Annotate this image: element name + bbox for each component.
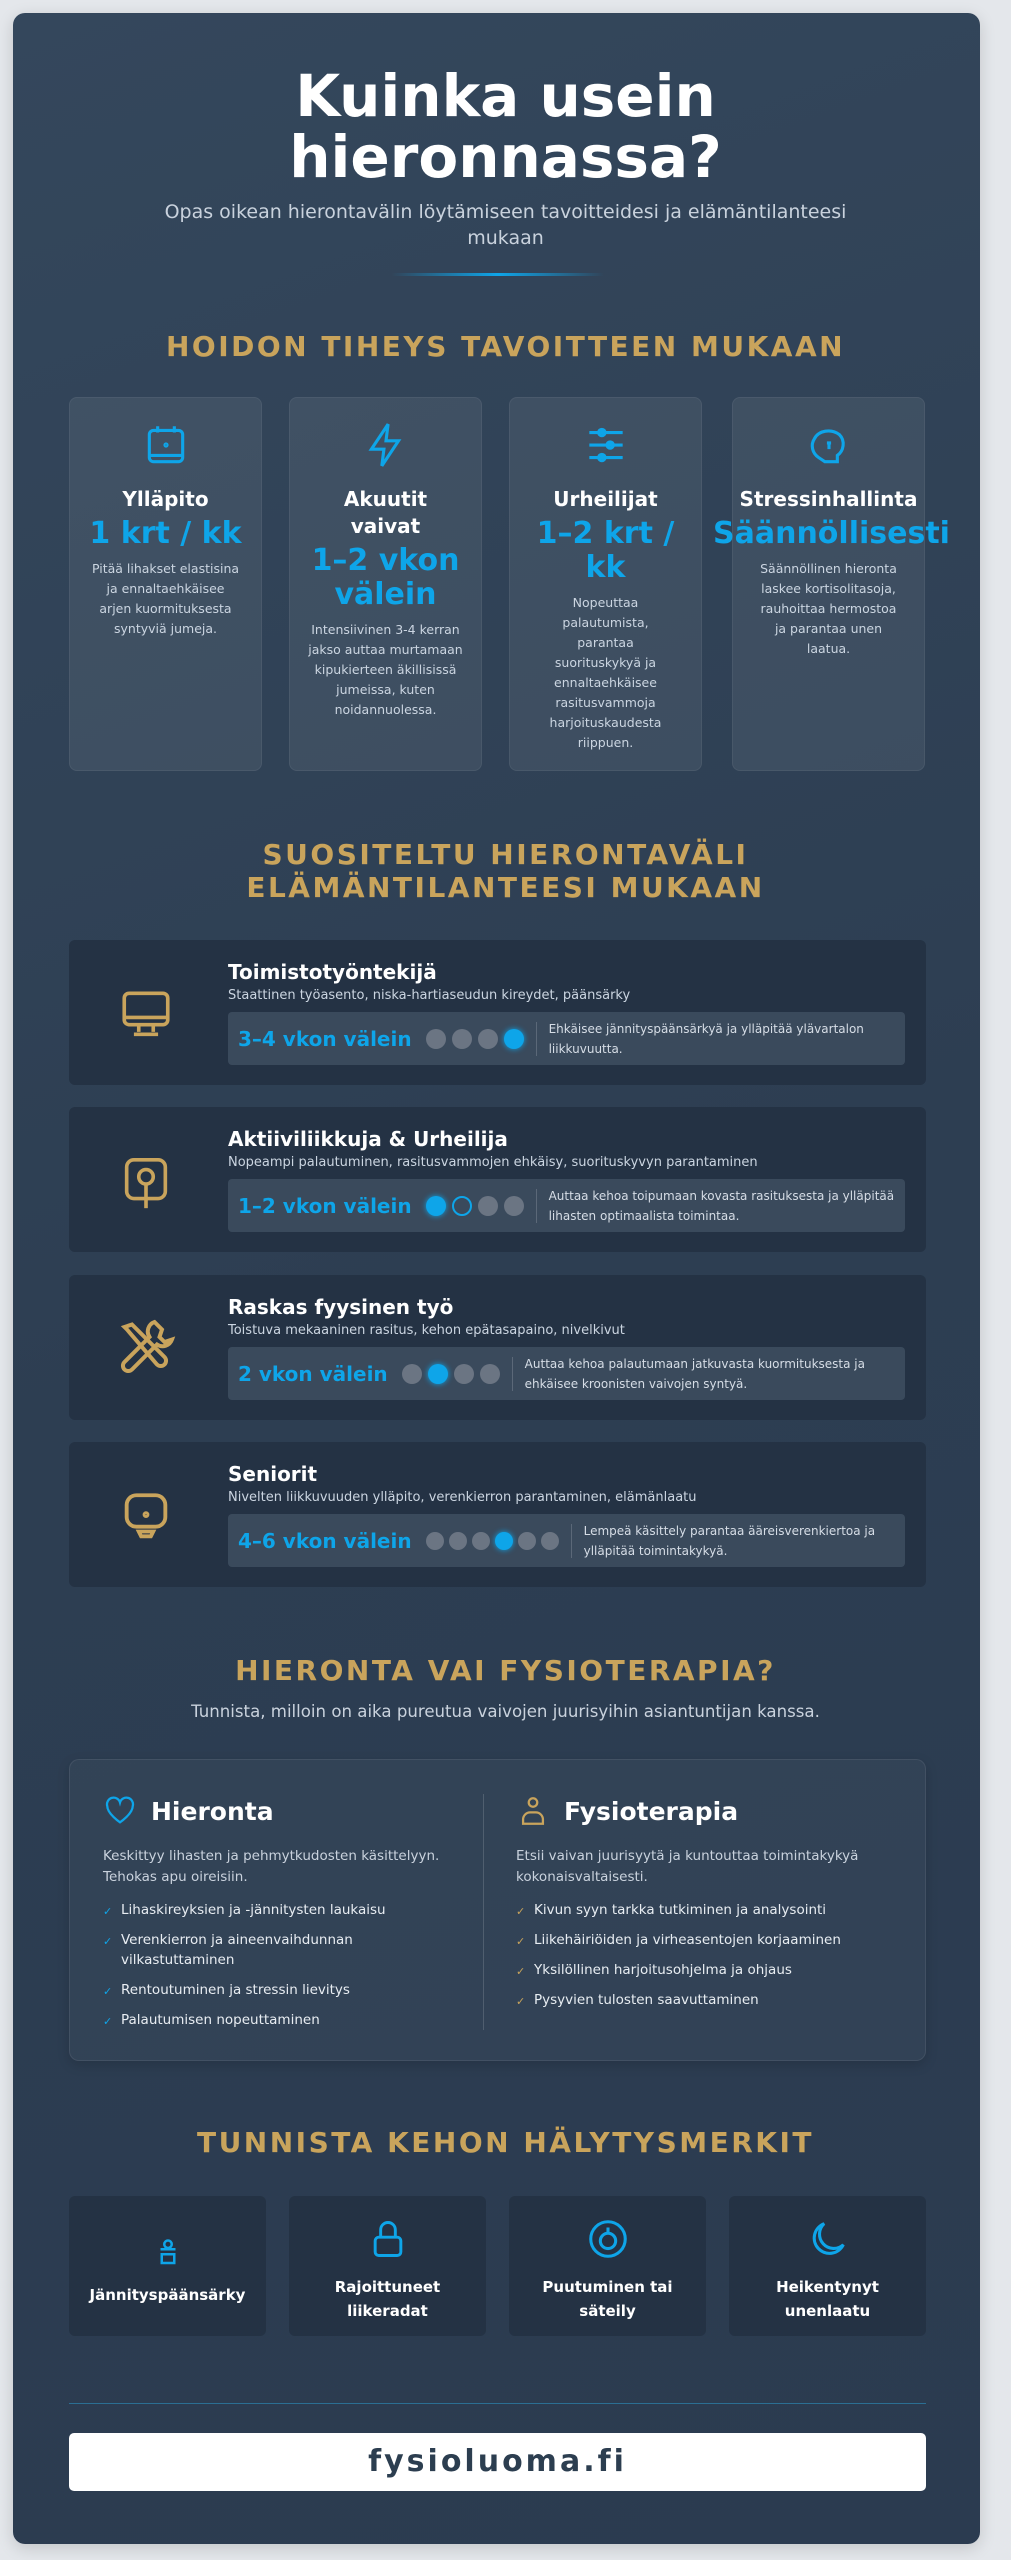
- column: Hieronta: vilkastuttaminen: [121, 1952, 234, 1968]
- goal card: Ylläpito: Ylläpito: [122, 487, 209, 511]
- frequency bar: [228, 1347, 905, 1400]
- warning card: range of motion: [289, 2196, 486, 2336]
- row: seniors: Nivelten liikkuvuuden ylläpito, verenkierron parantaminen, elämänlaatu: [228, 1490, 696, 1505]
- warning card: range of motion: Rajoittuneet: [335, 2278, 440, 2296]
- goal card: Urheilijat: Urheilijat: [553, 487, 658, 511]
- frequency bar: 3–4 vkon välein: [238, 1026, 412, 1050]
- row: seniors: [69, 1442, 926, 1587]
- column: Fysioterapia: Yksilöllinen harjoitusohjelma ja ohjaus: [534, 1962, 792, 1978]
- goal card: Akuutit: [289, 397, 482, 771]
- frequency bar: liikkuvuutta.: [549, 1042, 623, 1056]
- column: Fysioterapia: [516, 1796, 858, 2008]
- frequency bar: ehkäisee kroonisten vaivojen syntyä.: [525, 1376, 747, 1390]
- column: Fysioterapia: Fysioterapia: [564, 1796, 738, 1826]
- column: Fysioterapia: Pysyvien tulosten saavuttaminen: [534, 1992, 759, 2008]
- heading: life situations: SUOSITELTU HIERONTAVÄLI: [262, 838, 748, 871]
- column: Hieronta: Palautumisen nopeuttaminen: [121, 2012, 320, 2028]
- frequency bar: [228, 1012, 905, 1065]
- icon: calendar: [148, 426, 184, 464]
- footer line: [69, 2403, 926, 2404]
- icon: pin: [124, 1158, 168, 1208]
- warning card: headache: Jännityspäänsärky: [90, 2286, 245, 2304]
- icon: tools: [120, 1320, 176, 1373]
- row: heavy work: [69, 1275, 926, 1420]
- warning card: sleep: [729, 2196, 926, 2336]
- column: Hieronta: Verenkierron ja aineenvaihdunnan: [121, 1932, 353, 1948]
- row: athlete: Aktiiviliikkuja & Urheilija: [228, 1127, 508, 1151]
- row: seniors: Seniorit: [228, 1462, 317, 1486]
- goal card: Akuutit: 1–2 vkon: [312, 543, 459, 578]
- goal card: Urheilijat: kk: [586, 550, 625, 585]
- heading: life situations: [246, 838, 765, 904]
- warning card: sleep: Heikentynyt: [776, 2278, 879, 2296]
- warning card: headache: [69, 2196, 266, 2336]
- row: office worker: [69, 940, 926, 1085]
- goal card: Akuutit: vaivat: [351, 514, 420, 538]
- frequency bar: ylläpitää toimintakykyä.: [584, 1544, 727, 1558]
- row: office worker: Staattinen työasento, niska-hartiaseudun kireydet, päänsärky: [228, 988, 630, 1003]
- column: Hieronta: Rentoutuminen ja stressin lievitys: [121, 1982, 350, 1998]
- frequency bar: 2 vkon välein: [238, 1362, 388, 1386]
- column: Hieronta: Lihaskireyksien ja -jännitysten laukaisu: [121, 1902, 386, 1918]
- icon: lightning: [368, 423, 402, 467]
- frequency bar: lihasten optimaalista toimintaa.: [549, 1208, 739, 1222]
- row: athlete: [69, 1107, 926, 1252]
- title: [289, 62, 722, 191]
- column: Fysioterapia: kokonaisvaltaisesti.: [516, 1869, 648, 1885]
- goal card: Ylläpito: [69, 397, 262, 771]
- column: Fysioterapia: Liikehäiriöiden ja virheasentojen korjaaminen: [534, 1932, 841, 1948]
- heading: warning signs: TUNNISTA KEHON HÄLYTYSMERKIT: [197, 2126, 814, 2159]
- goal card: Stressinhallinta: Säännöllisesti: [713, 516, 950, 551]
- heading: goals: HOIDON TIHEYS TAVOITTEEN MUKAAN: [166, 330, 845, 363]
- icon: head: [810, 429, 845, 464]
- goal card: Akuutit: Intensiivinen 3-4 kerran jakso auttaa murtamaan kipukierteen äkillisissä jumeissa, kuten noidannuolessa.: [308, 622, 463, 717]
- warning card: numbness: säteily: [579, 2302, 636, 2320]
- frequency bar: Auttaa kehoa palautumaan jatkuvasta kuormituksesta ja: [525, 1356, 865, 1370]
- row: athlete: Nopeampi palautuminen, rasitusvammojen ehkäisy, suorituskyvyn parantaminen: [228, 1155, 758, 1170]
- frequency bar: Ehkäisee jännityspäänsärkyä ja ylläpitää ylävartalon: [549, 1022, 864, 1036]
- column: Fysioterapia: Etsii vaivan juurisyytä ja kuntouttaa toimintakykyä: [516, 1848, 858, 1864]
- goal card: Akuutit: välein: [334, 577, 437, 612]
- column: Hieronta: Tehokas apu oireisiin.: [103, 1869, 248, 1885]
- icon: device: [124, 1493, 168, 1538]
- goal card: Urheilijat: 1–2 krt /: [537, 516, 674, 551]
- frequency bar: Auttaa kehoa toipumaan kovasta rasituksesta ja ylläpitää: [549, 1188, 894, 1202]
- column: Hieronta: [102, 1796, 439, 2028]
- column: Hieronta: Hieronta: [151, 1796, 274, 1826]
- heading: life situations: ELÄMÄNTILANTEESI MUKAAN: [246, 871, 765, 904]
- subheading: Tunnista, milloin on aika pureutua vaivojen juurisyihin asiantuntijan kanssa.: [191, 1702, 820, 1721]
- title: Kuinka usein: [295, 62, 716, 130]
- goal card: Urheilijat: [509, 397, 702, 771]
- icon: monitor: [122, 992, 170, 1036]
- goal card: Ylläpito: Pitää lihakset elastisina ja ennaltaehkäisee arjen kuormituksesta syntyviä jumeja.: [92, 561, 239, 636]
- divider accent: [392, 273, 604, 276]
- title: hieronnassa?: [289, 123, 722, 191]
- row: office worker: Toimistotyöntekijä: [228, 960, 437, 984]
- comparison panel: [69, 1759, 926, 2061]
- frequency bar: [228, 1179, 905, 1232]
- footer: website: [69, 2433, 926, 2491]
- footer: website: fysioluoma.fi: [368, 2444, 627, 2479]
- goal card: Stressinhallinta: Stressinhallinta: [740, 487, 917, 511]
- subtitle: Opas oikean hierontavälin löytämiseen tavoitteidesi ja elämäntilanteesi mukaan: [165, 201, 846, 249]
- goal card: Stressinhallinta: [732, 397, 925, 771]
- goal card: Urheilijat: Nopeuttaa palautumista, parantaa suorituskykyä ja ennaltaehkäisee rasitusvammoja harjoituskaudesta riippuen.: [550, 595, 661, 750]
- frequency bar: Lempeä käsittely parantaa ääreisverenkiertoa ja: [584, 1524, 875, 1538]
- goal card: Ylläpito: 1 krt / kk: [89, 516, 242, 551]
- warning card: sleep: unenlaatu: [785, 2302, 870, 2320]
- icon: sliders: [589, 428, 623, 462]
- heading: massage vs physio: HIERONTA VAI FYSIOTERAPIA?: [235, 1654, 776, 1687]
- goal card: Stressinhallinta: Säännöllinen hieronta laskee kortisolitasoja, rauhoittaa hermostoa ja parantaa unen laatua.: [760, 561, 897, 656]
- frequency bar: 1–2 vkon välein: [238, 1194, 412, 1218]
- frequency bar: 4–6 vkon välein: [238, 1528, 412, 1552]
- warning card: range of motion: liikeradat: [347, 2302, 428, 2320]
- row: heavy work: Raskas fyysinen työ: [228, 1295, 453, 1319]
- column: Hieronta: Keskittyy lihasten ja pehmytkudosten käsittelyyn.: [103, 1848, 439, 1864]
- warning card: numbness: [509, 2196, 706, 2336]
- row: heavy work: Toistuva mekaaninen rasitus, kehon epätasapaino, nivelkivut: [228, 1323, 625, 1338]
- column: Fysioterapia: Kivun syyn tarkka tutkiminen ja analysointi: [534, 1902, 826, 1918]
- goal card: Akuutit: Akuutit: [344, 487, 427, 511]
- frequency bar: [228, 1514, 905, 1567]
- warning card: numbness: Puutuminen tai: [542, 2278, 673, 2296]
